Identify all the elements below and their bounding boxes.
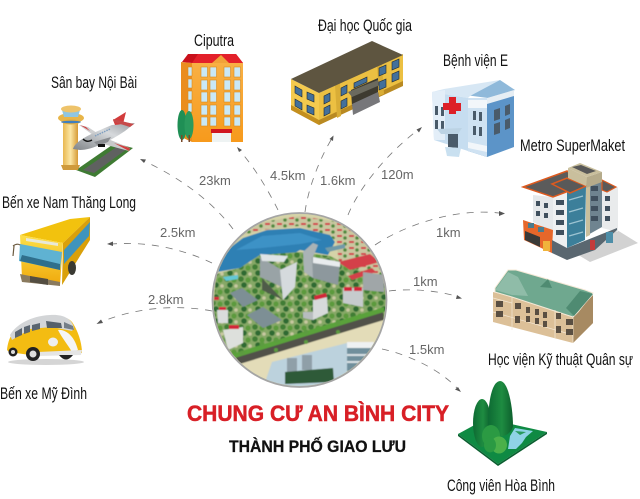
towers: [260, 257, 282, 287]
icon: yellow bus: [13, 217, 90, 286]
title: CHUNG CƯ AN BÌNH CITY: [187, 401, 449, 426]
arrow: Ciputra 4.5km: [237, 147, 278, 210]
distance labels: 1km: [413, 274, 438, 289]
distance labels: 4.5km: [270, 168, 305, 183]
icon: university: [291, 41, 403, 125]
arrow: Bến xe Nam Thăng Long 2.5km: [107, 242, 212, 263]
distance labels: [148, 167, 461, 357]
place labels: Bến xe Mỹ Đình: [0, 385, 87, 403]
arrow: Đại học Quốc gia 1.6km: [305, 136, 334, 212]
place labels: Sân bay Nội Bài: [51, 74, 137, 92]
place labels: Ciputra: [194, 32, 235, 50]
arrow: Bến xe Mỹ Đình 2.8km: [96, 308, 212, 324]
place labels: Bến xe Nam Thăng Long: [2, 194, 136, 212]
distance labels: 1.6km: [320, 173, 355, 188]
icon: park: [458, 381, 547, 466]
arrow: Học viện 1km: [389, 290, 462, 299]
place labels: Công viên Hòa Bình: [447, 477, 555, 495]
icon: yellow van: [7, 315, 84, 365]
distance labels: 2.5km: [160, 225, 195, 240]
icon: Ciputra building: [178, 54, 243, 142]
arrow: Metro 1km: [375, 211, 505, 245]
place labels: Đại học Quốc gia: [318, 17, 413, 35]
arrow: Sân bay Nội Bài 23km: [140, 159, 233, 229]
central aerial image: [212, 213, 388, 388]
distance labels: 1.5km: [409, 342, 444, 357]
distance labels: 2.8km: [148, 292, 183, 307]
icon: airport: [58, 106, 135, 177]
distance labels: 1km: [436, 225, 461, 240]
icon: hospital: [432, 80, 515, 157]
distance labels: 23km: [199, 173, 231, 188]
icon: Metro supermarket: [523, 163, 638, 262]
icon: military academy: [493, 270, 593, 343]
arrow: Công viên 1.5km: [382, 349, 461, 392]
place labels: Bệnh viện E: [443, 52, 508, 70]
title: THÀNH PHỐ GIAO LƯU: [229, 436, 406, 456]
title: [187, 401, 449, 456]
distance labels: 120m: [381, 167, 414, 182]
arrow: Bệnh viện E 120m: [348, 127, 422, 215]
